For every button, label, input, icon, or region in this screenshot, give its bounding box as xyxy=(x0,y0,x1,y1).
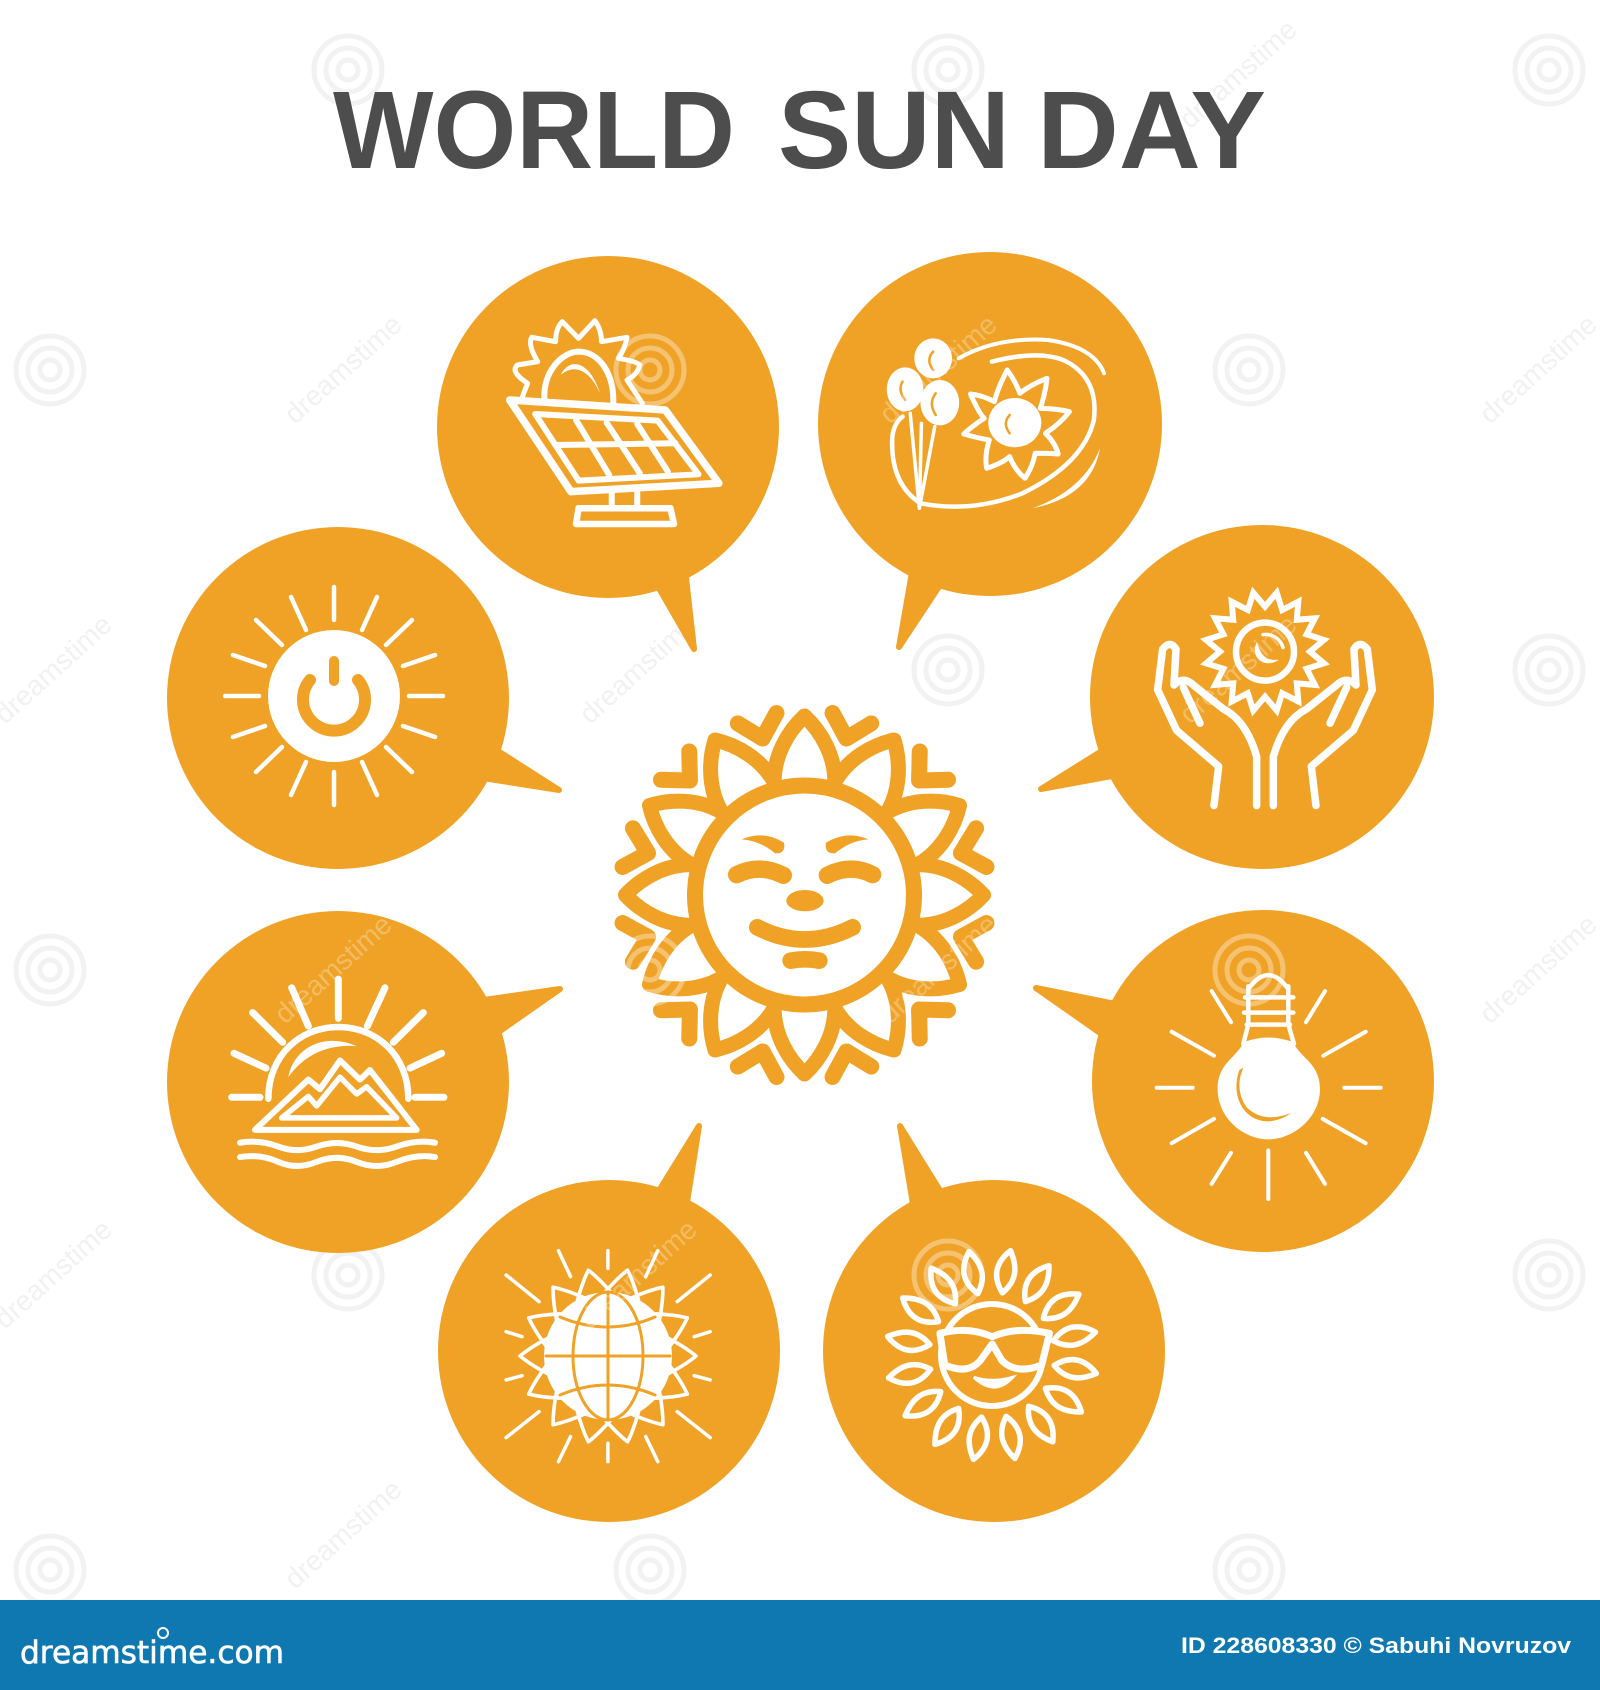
icon: power button sun xyxy=(225,587,443,805)
watermark text over orange: dreamstime xyxy=(268,909,398,1029)
central smiling sun xyxy=(623,713,986,1077)
icon: sun over mountains and waves xyxy=(232,979,444,1166)
panel: sunrise mountain bubble xyxy=(167,911,560,1253)
footer logo: dreamstime.com xyxy=(20,1635,284,1671)
watermark text on white: dreamstime xyxy=(278,1474,408,1594)
watermark spirals over orange xyxy=(616,336,1283,1309)
watermark text on white: dreamstime xyxy=(1473,309,1600,429)
panel: balloons and flower bubble xyxy=(818,252,1162,647)
footer credit: ID 228608330 © Sabuhi Novruzov xyxy=(1181,1633,1572,1658)
watermark text on white: dreamstime xyxy=(573,609,703,729)
sun face xyxy=(737,835,873,961)
watermark text over orange: dreamstime xyxy=(573,1214,703,1334)
panel: hands holding sun bubble xyxy=(1041,525,1434,869)
panel: solar panel bubble xyxy=(437,256,779,649)
icon: balloons and flower xyxy=(887,338,1104,508)
footer bar xyxy=(0,1600,1600,1690)
watermark text over orange xyxy=(268,309,1303,1334)
panel: sunglasses sun bubble xyxy=(823,1126,1165,1522)
watermark text over orange: dreamstime xyxy=(1173,609,1303,729)
panel: bulb bubble xyxy=(1036,910,1434,1252)
watermark text over orange: dreamstime xyxy=(873,909,1003,1029)
icon: sun with sunglasses xyxy=(886,1249,1098,1461)
watermark text on white: dreamstime xyxy=(1173,14,1303,134)
watermark text on white: dreamstime xyxy=(1473,909,1600,1029)
icon: hands holding sun xyxy=(1158,593,1372,806)
title: WORLD xyxy=(333,69,735,192)
icon: light bulb with rays xyxy=(1157,975,1381,1199)
panel: power sun bubble xyxy=(167,527,559,869)
watermark text over orange: dreamstime xyxy=(873,309,1003,429)
watermark text on white: dreamstime xyxy=(278,309,408,429)
panel: globe sun bubble xyxy=(438,1126,780,1522)
title: DAY xyxy=(1037,69,1266,192)
icon: solar panel with sun xyxy=(510,321,719,524)
title: SUN xyxy=(778,69,1010,192)
icon: globe with sun rays xyxy=(506,1251,710,1462)
